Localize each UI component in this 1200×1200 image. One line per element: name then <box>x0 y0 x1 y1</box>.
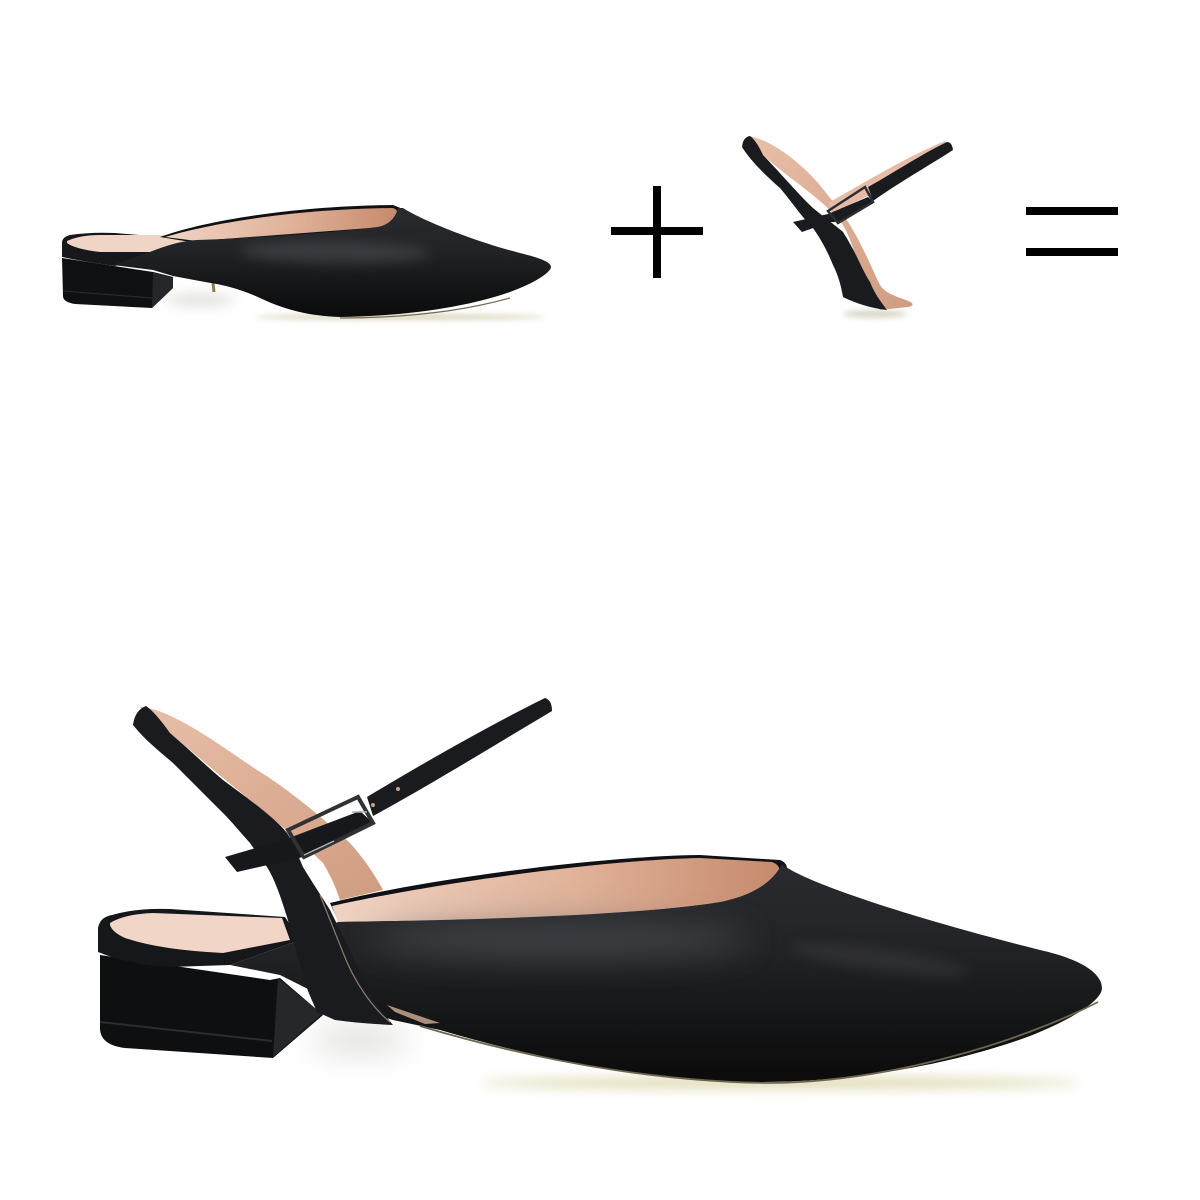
plus sign <box>611 186 703 278</box>
gold pin <box>213 283 214 292</box>
upper strap end <box>367 698 552 816</box>
buckle <box>828 187 873 223</box>
heel seat rim <box>98 909 300 967</box>
rear strap lining <box>140 707 383 900</box>
front strap <box>868 142 953 201</box>
upper <box>230 864 1102 1082</box>
photo: detachable ankle strap <box>742 136 953 318</box>
insole <box>67 235 197 252</box>
strap holes <box>371 787 400 807</box>
rear strap <box>133 706 393 1025</box>
upper <box>113 208 551 317</box>
sole edge <box>420 1002 1098 1083</box>
equals sign <box>1026 207 1118 256</box>
rear strap <box>742 136 887 310</box>
front strap lining <box>828 141 950 212</box>
heel block <box>100 955 323 1058</box>
rear strap lining <box>748 136 912 310</box>
tongue <box>793 197 873 232</box>
upper highlights <box>370 920 750 960</box>
heel block <box>62 258 173 308</box>
heel block side <box>273 978 322 1057</box>
heel seat rim <box>62 233 200 266</box>
shoe shadow <box>480 1078 1080 1088</box>
insole <box>110 913 290 953</box>
sole sliver <box>387 1005 440 1024</box>
photo: black mule shoe <box>62 205 551 320</box>
tongue <box>225 811 373 872</box>
photo: assembled slingback shoe <box>98 698 1102 1088</box>
upper highlight <box>240 239 430 265</box>
far trim and lining <box>160 205 403 243</box>
buckle <box>288 797 373 857</box>
far trim and lining <box>330 855 787 925</box>
sole line <box>340 298 510 318</box>
strap stitch edge <box>320 895 390 1022</box>
